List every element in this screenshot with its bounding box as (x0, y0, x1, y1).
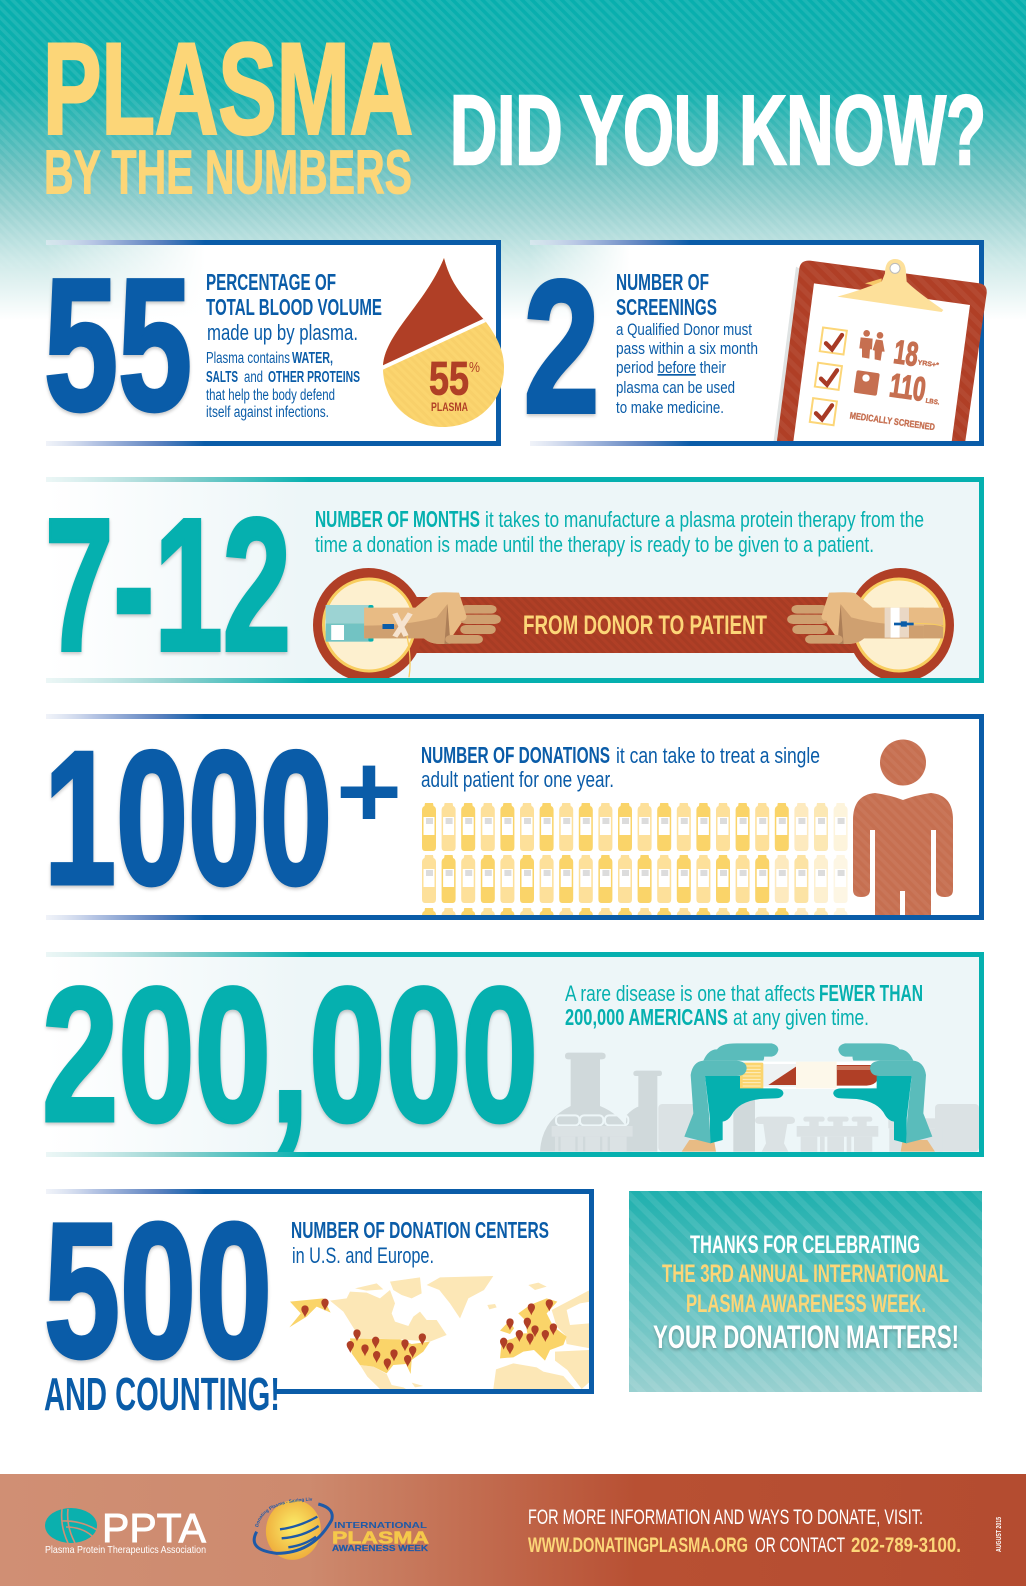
text: donations description: it can take to treat a single (616, 743, 820, 768)
text: rare disease description: FEWER THAN (819, 980, 923, 1006)
text: and counting: AND COUNTING! (44, 1368, 280, 1420)
logo: PPTA (45, 1505, 207, 1556)
right glove (833, 1043, 935, 1152)
stat: 1000+: + (336, 734, 402, 850)
logo: PPTA: Plasma Protein Therapeutics Association (45, 1544, 206, 1556)
panel: rare disease (42, 948, 984, 1162)
text: percentage description (206, 269, 382, 421)
text: donation centers description: in U.S. and Europe. (292, 1243, 434, 1268)
stat: 2: 2 (524, 242, 600, 453)
text: date: AUGUST 2015 (994, 1517, 1003, 1552)
logo: international plasma awareness week: PLASMA (332, 1528, 429, 1548)
text: rare disease description: 200,000 AMERICANS (565, 1004, 728, 1030)
text: contact information: 202-789-3100. (851, 1534, 961, 1557)
text: screenings description: to make medicine. (616, 398, 724, 417)
panel: number of screenings (524, 240, 987, 453)
text: screenings description (616, 269, 758, 417)
text: percentage description: itself against infections. (206, 404, 329, 421)
text: screenings description: plasma can be used (616, 378, 735, 397)
text: percentage description: SALTS (206, 369, 238, 386)
text: screenings description: pass within a six month (616, 339, 758, 358)
stat: 1000+: 1000 (44, 712, 332, 924)
text: donation centers description (291, 1217, 549, 1268)
icon: plasma drop: PLASMA (431, 402, 468, 414)
text: percentage description: made up by plasma. (207, 320, 358, 345)
text: months description: it takes to manufacture a plasma protein therapy from the (485, 507, 924, 532)
title: plasma by the numbers: BY THE NUMBERS (44, 138, 412, 208)
logo: international plasma awareness week: INTERNATIONAL (334, 1520, 427, 1530)
text: percentage description: and (244, 369, 263, 386)
icon: patient arm (787, 592, 944, 644)
text: screenings description: NUMBER OF (616, 269, 709, 295)
map: donation center locations (289, 1276, 590, 1389)
panel: thanks callout (629, 1191, 982, 1392)
stat: 500: 500 (44, 1182, 272, 1398)
icon: clipboard checklist: YRS+* (917, 359, 940, 369)
text: percentage description: Plasma contains (206, 350, 290, 367)
text: contact information: WWW.DONATINGPLASMA.ORG (528, 1534, 748, 1557)
icon: plasma drop (383, 258, 504, 427)
test tube (737, 1062, 882, 1091)
illustration: lab glassware and gloved hands holding test tube (540, 1043, 979, 1152)
title: plasma by the numbers: PLASMA (43, 16, 413, 162)
logo: international plasma awareness week: AWARENESS WEEK (332, 1544, 428, 1553)
icon: clipboard checklist: 110 (887, 367, 928, 409)
text: months description (315, 506, 924, 557)
text: contact information (528, 1506, 961, 1557)
text: donations description (421, 742, 820, 792)
text: donations description: NUMBER OF DONATIONS (421, 742, 610, 768)
icon: plasma drop: % (469, 359, 480, 376)
banner: from donor to patient: FROM DONOR TO PATIENT (523, 610, 767, 640)
icon: plasma drop: 55 (429, 352, 469, 404)
icon: donor arm (326, 592, 501, 677)
footer (0, 1474, 1026, 1586)
text: screenings description: a Qualified Donor must (616, 320, 752, 339)
banner: from donor to patient (313, 568, 954, 682)
panel: donation centers (44, 1182, 594, 1420)
text: screenings description: period before their (616, 358, 726, 377)
text: rare disease description: at any given time. (733, 1005, 869, 1030)
text: percentage description: OTHER PROTEINS (268, 369, 360, 386)
stat: 7-12: 7-12 (45, 480, 291, 691)
text: donation centers description: NUMBER OF DONATION CENTERS (291, 1217, 549, 1243)
logo: international plasma awareness week (252, 1497, 429, 1560)
text: contact information: OR CONTACT (755, 1534, 845, 1557)
title: plasma by the numbers (43, 16, 413, 208)
text: percentage description: that help the body defend (206, 387, 335, 404)
panel: number of months (45, 477, 984, 691)
text: months description: time a donation is made until the therapy is ready to be given to a patient. (315, 532, 874, 557)
left glove (682, 1043, 783, 1152)
icon: clipboard checklist: LBS. (925, 398, 940, 407)
panel: number of donations (46, 714, 984, 920)
header background (0, 0, 1026, 320)
icon: clipboard checklist: MEDICALLY SCREENED (849, 410, 936, 432)
text: rare disease description (565, 980, 923, 1030)
logo: international plasma awareness week: Donating Plasma - Saving Lives (255, 1497, 312, 1527)
text: percentage description: PERCENTAGE OF (206, 269, 336, 295)
text: rare disease description: A rare disease is one that affects (565, 981, 815, 1006)
stat: 200,000: 200,000 (42, 948, 538, 1162)
text: percentage description: WATER, (292, 350, 333, 367)
text: percentage description: TOTAL BLOOD VOLUME (206, 294, 382, 320)
icon: person (853, 740, 953, 915)
icon: clipboard checklist (773, 259, 987, 443)
text: screenings description: SCREENINGS (616, 294, 717, 320)
chart: rows of plasma bottles (422, 803, 848, 915)
text: months description: NUMBER OF MONTHS (315, 506, 480, 532)
text: donations description: adult patient for one year. (421, 767, 614, 792)
icon: clipboard checklist: 18 (892, 334, 920, 374)
logo: PPTA: PPTA (102, 1505, 207, 1551)
panel: percentage of blood volume (44, 240, 520, 450)
stat: 55: 55 (44, 240, 192, 450)
